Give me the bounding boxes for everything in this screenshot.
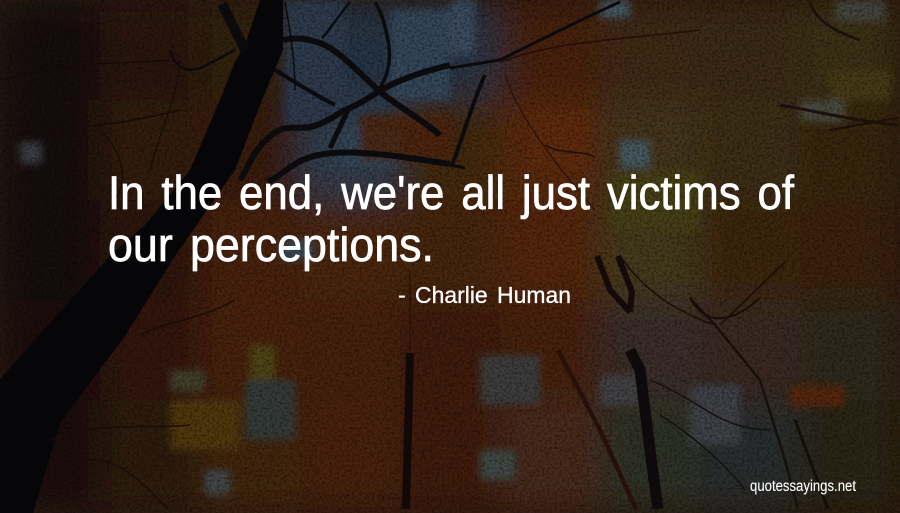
quote line 1: In the end, we're all just victims of (108, 166, 795, 219)
quote text (108, 166, 795, 271)
author attribution: - Charlie Human (398, 282, 571, 308)
quote line 2: our perceptions. (108, 218, 434, 271)
watermark: quotessayings.net (750, 478, 857, 495)
